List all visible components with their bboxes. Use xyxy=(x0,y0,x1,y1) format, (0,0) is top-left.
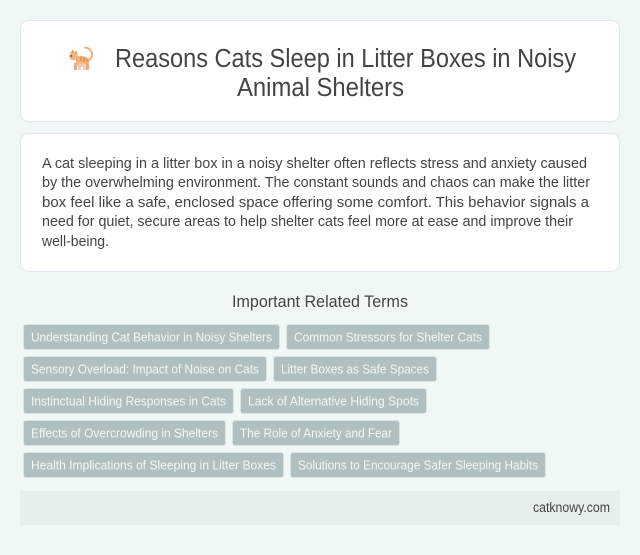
tag xyxy=(290,452,546,478)
tag: Litter Boxes as Safe Spaces xyxy=(281,362,429,376)
tag: Health Implications of Sleeping in Litter Boxes xyxy=(31,458,276,472)
title: Animal Shelters xyxy=(237,74,404,102)
related terms tags xyxy=(24,324,546,478)
description text: A cat sleeping in a litter box in a noisy shelter often reflects stress and anxiety caused xyxy=(42,155,587,172)
footer site name: catknowy.com xyxy=(533,500,610,515)
tag xyxy=(24,324,280,350)
description text: by the overwhelming environment. The constant sounds and chaos can make the litter xyxy=(42,174,590,191)
tag xyxy=(24,420,226,446)
tag: Lack of Alternative Hiding Spots xyxy=(248,394,419,408)
title xyxy=(115,45,576,102)
tag xyxy=(24,388,234,414)
tag xyxy=(274,356,436,382)
tag: Instinctual Hiding Responses in Cats xyxy=(31,394,226,408)
tag xyxy=(24,452,284,478)
tag: Solutions to Encourage Safer Sleeping Habits xyxy=(298,458,538,472)
title: Reasons Cats Sleep in Litter Boxes in Noisy xyxy=(115,45,576,73)
description text xyxy=(41,155,590,250)
tag: Common Stressors for Shelter Cats xyxy=(294,330,482,344)
tag: Understanding Cat Behavior in Noisy Shelters xyxy=(31,330,272,344)
tag xyxy=(24,356,266,382)
tag: Effects of Overcrowding in Shelters xyxy=(31,426,218,440)
header panel xyxy=(20,20,620,122)
icon: cat xyxy=(69,48,92,70)
tag xyxy=(240,388,426,414)
tag xyxy=(232,420,400,446)
tag xyxy=(286,324,490,350)
description text: well-being. xyxy=(41,233,109,250)
description text: need for quiet, secure areas to help shelter cats feel more at ease and improve their xyxy=(42,213,573,230)
heading: important related terms: Important Related Terms xyxy=(232,293,408,311)
footer xyxy=(20,491,620,525)
tag: The Role of Anxiety and Fear xyxy=(240,426,393,440)
panel: description xyxy=(20,134,620,272)
tag: Sensory Overload: Impact of Noise on Cats xyxy=(31,362,259,376)
description text: box feel like a safe, enclosed space offering some comfort. This behavior signals a xyxy=(42,194,590,211)
